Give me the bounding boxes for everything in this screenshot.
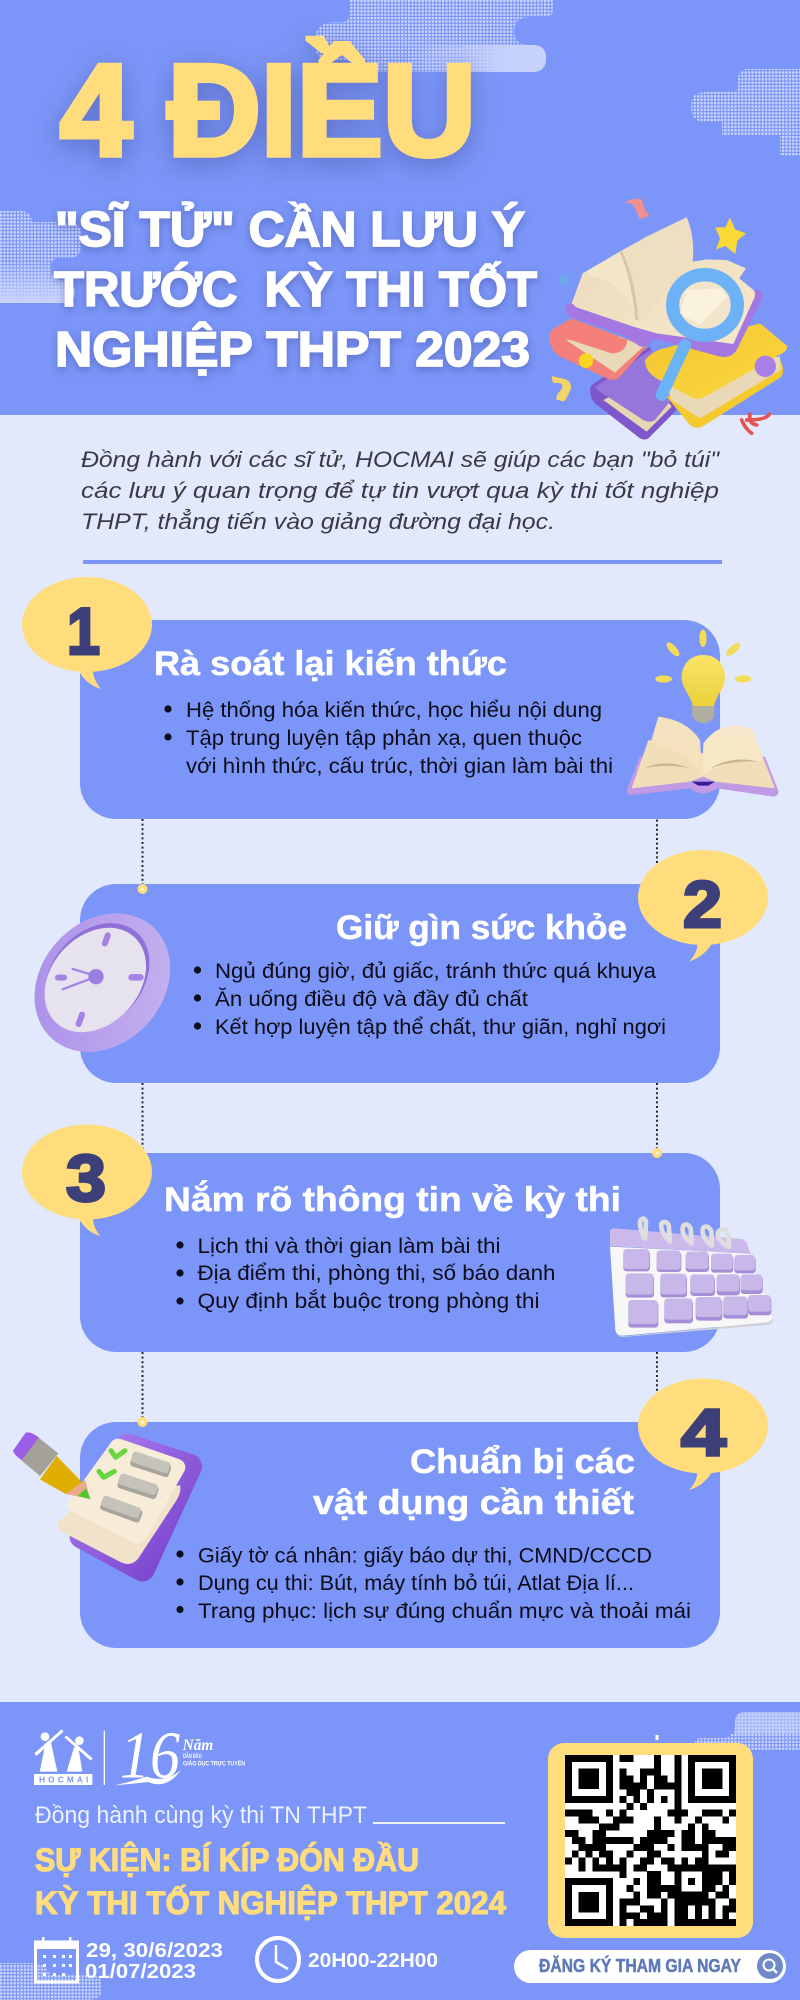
number bubble 4 bbox=[638, 1378, 768, 1490]
heading: Chuẩn bị các bbox=[410, 1443, 635, 1481]
intro paragraph: THPT, thẳng tiến vào giảng đường đại học. bbox=[81, 509, 555, 534]
event title bbox=[35, 1842, 506, 1921]
heading: Rà soát lại kiến thức bbox=[154, 645, 507, 683]
magnifier bbox=[662, 275, 737, 395]
lower sheet bbox=[57, 1485, 180, 1564]
upper sheet bbox=[67, 1439, 185, 1543]
logo: 16 years: Năm bbox=[182, 1737, 213, 1754]
rings bbox=[640, 1219, 729, 1247]
icon: search bbox=[757, 1953, 783, 1979]
grey bars bbox=[99, 1453, 172, 1523]
icon: calendar bbox=[610, 1219, 773, 1337]
heading: Nắm rõ thông tin về kỳ thi bbox=[164, 1181, 621, 1219]
heading bbox=[313, 1443, 635, 1522]
logo: 16 years: 16 bbox=[120, 1719, 180, 1792]
yellow book bbox=[645, 323, 787, 428]
number bubble 4: 4 bbox=[681, 1395, 726, 1469]
bullet list bbox=[194, 960, 666, 1039]
bullet list: Trang phục: lịch sự đúng chuẩn mực và thoải mái bbox=[198, 1600, 691, 1623]
QR code card bbox=[548, 1743, 753, 1938]
bullet list: Địa điểm thi, phòng thi, số báo danh bbox=[198, 1262, 556, 1285]
panel: card 4 bbox=[80, 1378, 768, 1648]
bullet list: Dụng cụ thi: Bút, máy tính bỏ túi, Atlat Địa lí... bbox=[198, 1572, 634, 1595]
connector dot card 2 bbox=[138, 884, 148, 894]
bulb bbox=[682, 655, 725, 723]
bullet list: Kết hợp luyện tập thể chất, thư giãn, nghỉ ngơi bbox=[215, 1016, 666, 1039]
event time: 20H00-22H00 bbox=[308, 1950, 438, 1972]
number bubble 1 bbox=[22, 577, 152, 689]
clipboard back bbox=[70, 1434, 202, 1582]
panel: card 1 bbox=[22, 577, 720, 819]
check marks bbox=[99, 1451, 125, 1477]
icon: purple clock bbox=[7, 886, 198, 1079]
cloud: footer right bbox=[694, 1712, 800, 1750]
logo: 16 years bbox=[114, 1719, 245, 1792]
register button: ĐĂNG KÝ THAM GIA NGAY bbox=[539, 1955, 741, 1976]
panel: card 2 bbox=[80, 850, 768, 1083]
subtitle lines: NGHIỆP THPT 2023 bbox=[55, 322, 530, 377]
blue ball bbox=[559, 274, 570, 286]
intro paragraph: Đồng hành với các sĩ tử, HOCMAI sẽ giúp các bạn "bỏ túi" bbox=[81, 447, 720, 472]
bullet list: Tập trung luyện tập phản xạ, quen thuộc bbox=[186, 727, 582, 750]
cloud: footer left bbox=[0, 1963, 102, 2000]
number bubble 3: 3 bbox=[66, 1141, 106, 1215]
event title: KỲ THI TỐT NGHIỆP THPT 2024 bbox=[35, 1885, 506, 1921]
icon: pencil and checklist bbox=[13, 1432, 202, 1582]
panel: card 3 bbox=[22, 1124, 720, 1352]
event dates: 29, 30/6/2023 bbox=[86, 1940, 223, 1962]
red book bbox=[549, 318, 647, 380]
cloud: right halftone bbox=[691, 69, 800, 156]
icon: open book with light bulb bbox=[627, 630, 778, 797]
intro paragraph bbox=[81, 447, 720, 534]
event title: SỰ KIỆN: BÍ KÍP ĐÓN ĐẦU bbox=[35, 1842, 419, 1878]
number bubble 2: 2 bbox=[683, 867, 722, 941]
clock marks bbox=[55, 931, 144, 1028]
purple ball bbox=[755, 356, 776, 377]
subtitle lines: "SĨ TỬ" CẦN LƯU Ý bbox=[55, 202, 525, 257]
bullet list: Hệ thống hóa kiến thức, học hiểu nội dung bbox=[186, 699, 602, 722]
number bubble 1: 1 bbox=[67, 594, 100, 668]
rays bbox=[655, 630, 751, 683]
pink ribbon bbox=[624, 199, 649, 219]
book bbox=[627, 717, 778, 797]
title: 4 Điều: 4 ĐIỀU bbox=[60, 37, 476, 183]
connector dot card 3 bbox=[652, 1148, 662, 1158]
pencil bbox=[13, 1432, 90, 1499]
bullet list: Ăn uống điều độ và đầy đủ chất bbox=[215, 988, 528, 1011]
cloud: top halftone bbox=[315, 0, 553, 72]
QR modules bbox=[565, 1755, 736, 1926]
bullet list: Giấy tờ cá nhân: giấy báo dự thi, CMND/CCCD bbox=[198, 1544, 652, 1568]
logo: Hocmai bbox=[34, 1719, 245, 1792]
event dates bbox=[85, 1940, 223, 1983]
star bbox=[715, 217, 746, 254]
bullet list: với hình thức, cấu trúc, thời gian làm bài thi bbox=[186, 755, 613, 778]
heading: vật dụng cần thiết bbox=[313, 1484, 634, 1522]
yellow ball bbox=[579, 353, 593, 368]
open book base bbox=[566, 290, 762, 357]
heading: Giữ gìn sức khỏe bbox=[336, 909, 627, 947]
register button bbox=[514, 1950, 786, 1983]
icon: calendar outline bbox=[35, 1937, 78, 1982]
hero banner bbox=[0, 0, 800, 415]
bullet list: Quy định bắt buộc trong phòng thi bbox=[198, 1290, 540, 1313]
footer panel bbox=[0, 1702, 800, 2000]
red ribbon bbox=[742, 414, 769, 433]
subtitle lines bbox=[54, 202, 537, 377]
connectors between cards bbox=[142, 815, 657, 1420]
calendar squares bbox=[623, 1251, 771, 1328]
bullet list: Lịch thi và thời gian làm bài thi bbox=[198, 1235, 500, 1258]
subtitle lines: TRƯỚC KỲ THI TỐT bbox=[54, 262, 537, 317]
intro paragraph: các lưu ý quan trọng để tự tin vượt qua kỳ thi tốt nghiệp bbox=[81, 478, 719, 503]
logo: 16 years: DẪN ĐẦU bbox=[183, 1753, 202, 1760]
purple book bbox=[590, 347, 677, 439]
cloud: left halftone bbox=[0, 211, 82, 303]
figures bbox=[34, 1729, 93, 1772]
event dates: 01/07/2023 bbox=[85, 1961, 196, 1983]
icon: clock outline bbox=[257, 1938, 299, 1981]
logo: 16 years: GIÁO DỤC TRỰC TUYẾN bbox=[183, 1761, 245, 1768]
connector dot card 4 bbox=[138, 1417, 148, 1427]
logo wordmark: HOCMAI bbox=[39, 1774, 88, 1784]
bullet list bbox=[176, 1235, 556, 1313]
bullet list bbox=[164, 699, 613, 778]
number bubble 3 bbox=[22, 1124, 152, 1236]
bullet list: Ngủ đúng giờ, đủ giấc, tránh thức quá khuya bbox=[215, 960, 656, 983]
yellow ribbon bbox=[552, 376, 571, 402]
footer tagline: Đồng hành cùng kỳ thi TN THPT bbox=[35, 1802, 367, 1829]
clock hands bbox=[63, 969, 92, 989]
number bubble 2 bbox=[638, 850, 768, 962]
bullet list bbox=[176, 1544, 691, 1623]
open book pages bbox=[572, 217, 755, 344]
icon: stack of books with magnifier bbox=[549, 199, 787, 439]
